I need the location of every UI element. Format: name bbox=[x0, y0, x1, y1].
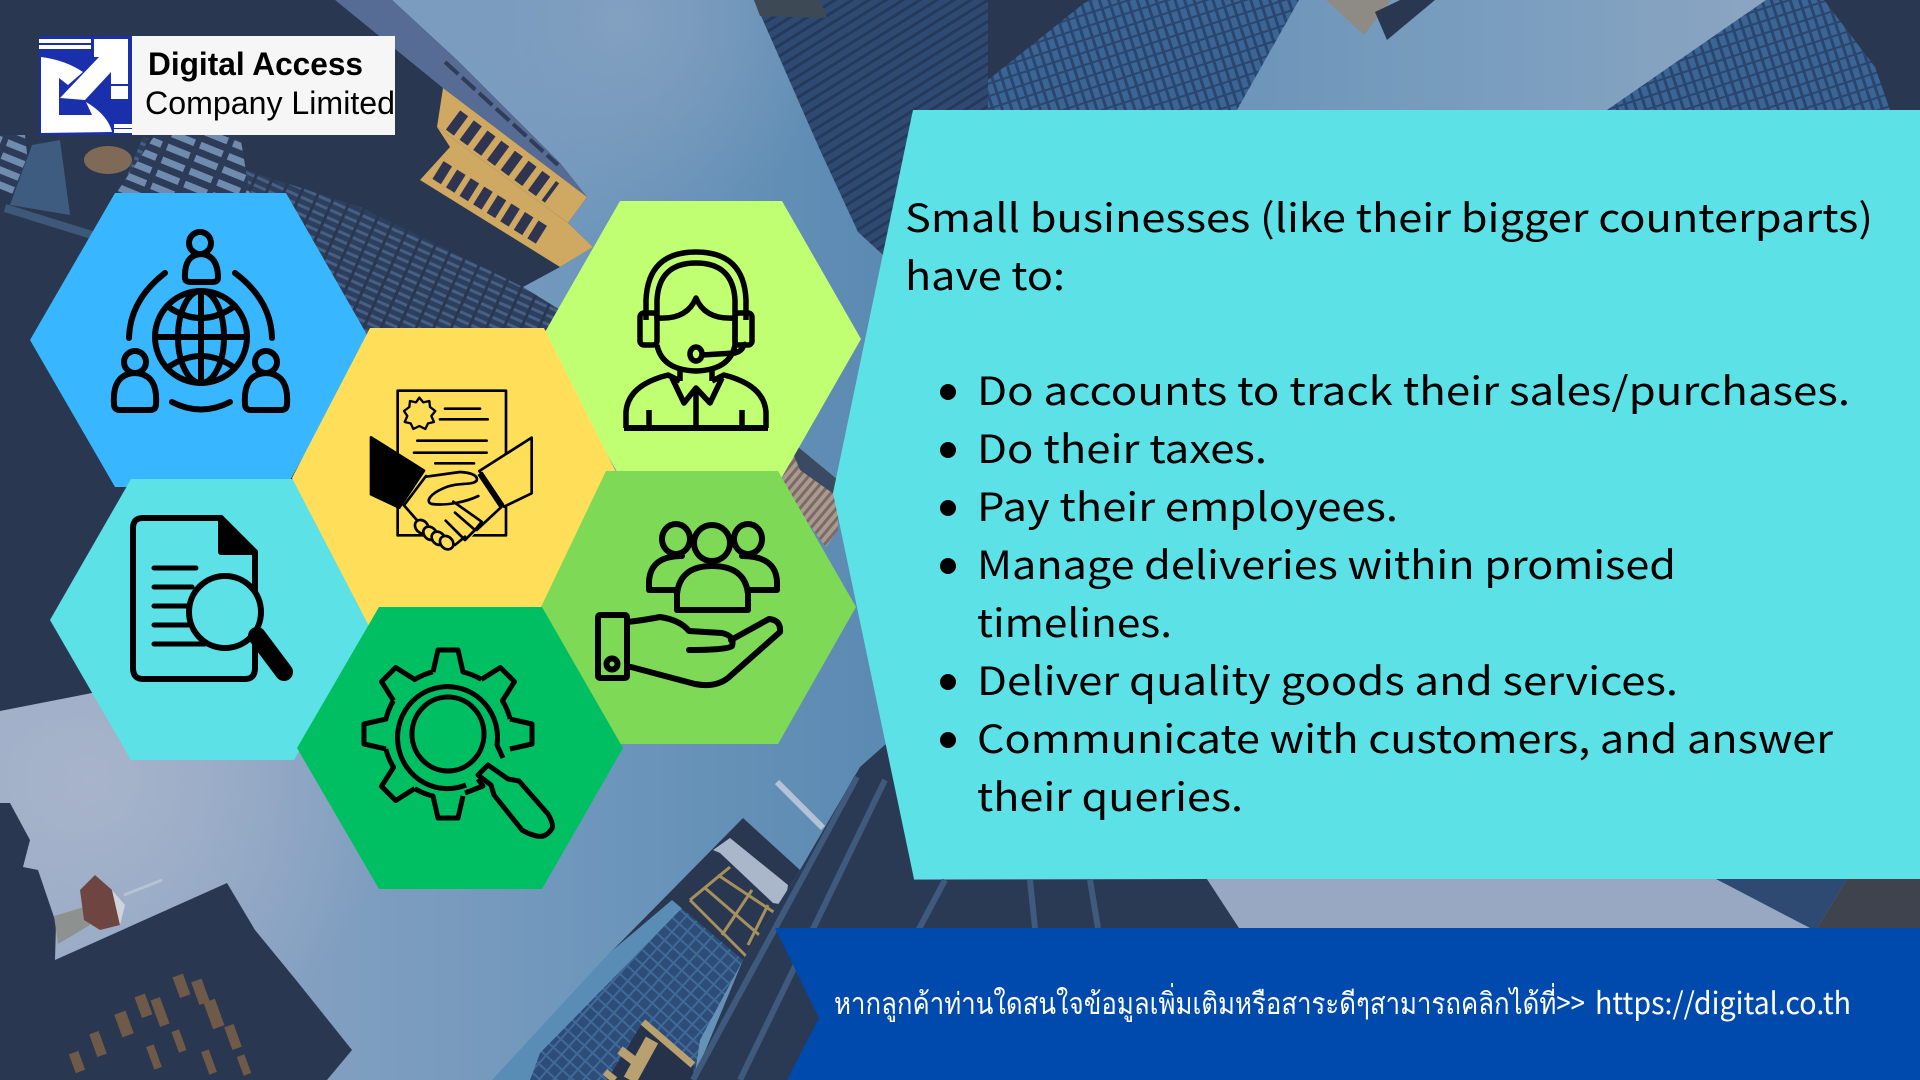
bullet list: Do their taxes. bbox=[977, 419, 1267, 475]
logo text: Digital Access bbox=[148, 46, 363, 82]
panel: main text bbox=[833, 110, 1920, 879]
icon: gear magnifier bbox=[364, 650, 552, 836]
intro text: have to: bbox=[905, 246, 1065, 302]
bullet list bbox=[940, 361, 1850, 823]
icon: global network bbox=[114, 232, 287, 410]
icon: support agent bbox=[624, 252, 768, 428]
bullet list: Do accounts to track their sales/purchases. bbox=[977, 361, 1850, 417]
bullet list: timelines. bbox=[977, 593, 1172, 649]
logo mark bbox=[39, 36, 132, 135]
bullet list: Communicate with customers, and answer bbox=[977, 709, 1834, 765]
hexagon: blue bbox=[30, 193, 370, 487]
hexagon: yellow bbox=[292, 328, 619, 628]
hexagon: lime bbox=[541, 201, 861, 477]
banner: contact link bbox=[775, 928, 1920, 1080]
hexagon: dark green bbox=[297, 607, 623, 889]
bullet list: Deliver quality goods and services. bbox=[977, 651, 1678, 707]
icon: contract handshake bbox=[371, 391, 532, 552]
intro text bbox=[905, 188, 1873, 302]
bullet list: Manage deliveries within promised bbox=[977, 535, 1676, 591]
intro text: Small businesses (like their bigger counterparts) bbox=[905, 188, 1873, 244]
hexagon: cyan bbox=[50, 479, 373, 760]
logo text: Company Limited bbox=[145, 85, 395, 121]
bullet list: their queries. bbox=[977, 767, 1243, 823]
banner text: หากลูกค้าท่านใดสนใจข้อมูลเพิ่มเติมหรือสาระดีๆสามารถคลิกได้ที่>> bbox=[834, 979, 1585, 1023]
background: gold facade bbox=[420, 88, 593, 267]
bullet list: Pay their employees. bbox=[977, 477, 1398, 533]
icon: document search bbox=[133, 518, 284, 679]
hexagon: light green bbox=[541, 471, 856, 744]
banner text: https://digital.co.th bbox=[1595, 979, 1851, 1023]
logo bbox=[39, 36, 395, 135]
icon: team on hand bbox=[598, 524, 780, 685]
logo text bbox=[145, 46, 395, 121]
